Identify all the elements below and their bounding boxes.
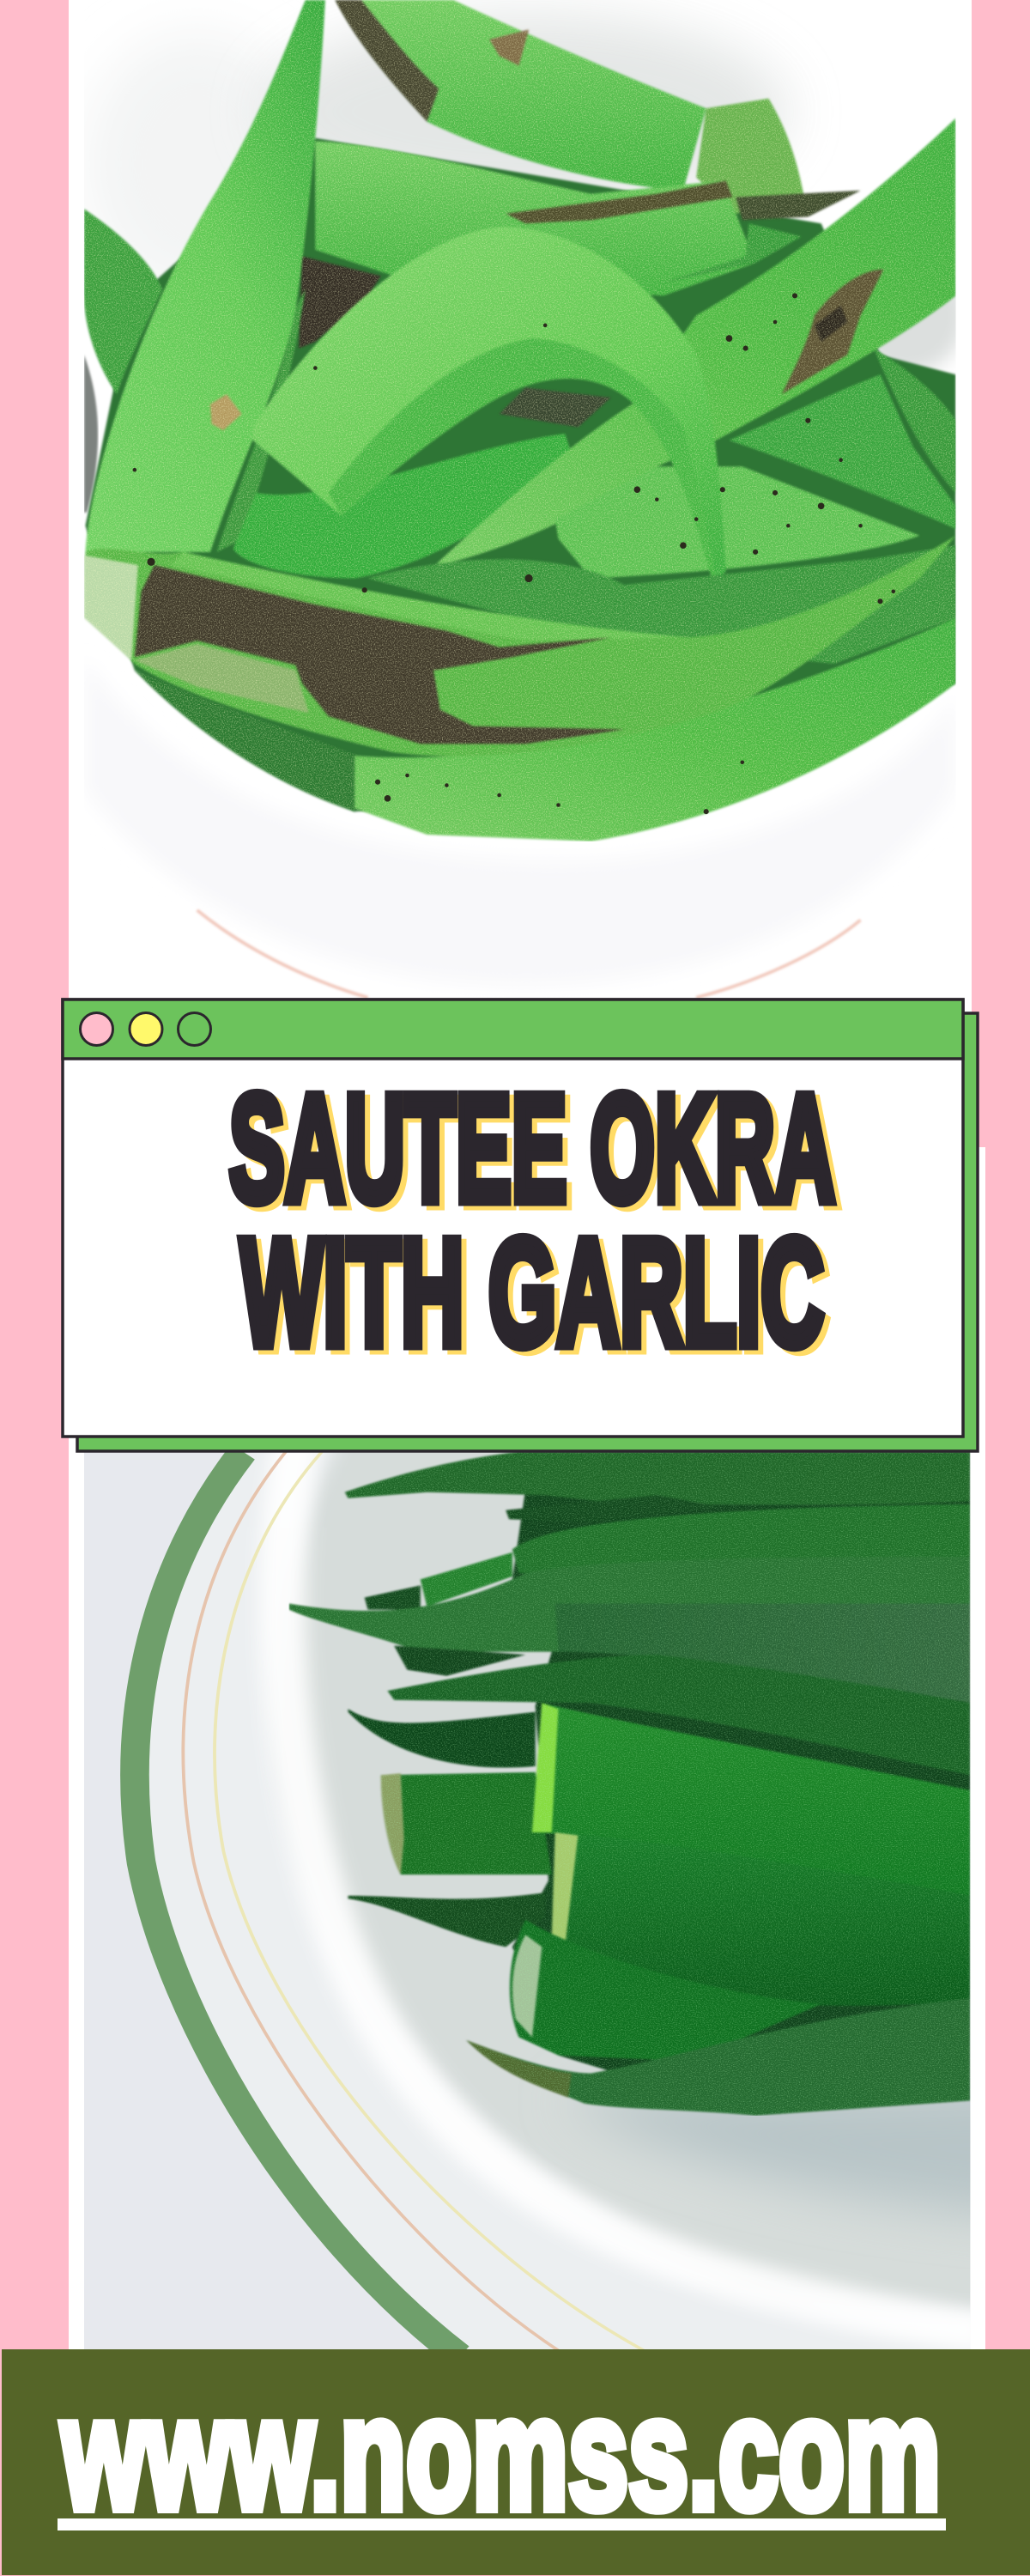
charred piece	[299, 256, 381, 349]
plate	[132, 1417, 1030, 2356]
okra: lower right pod	[729, 374, 956, 529]
okra: small dark under pod	[394, 1646, 525, 1676]
dark shadow base between pods	[512, 1452, 970, 2116]
black pepper specks	[133, 293, 895, 814]
okra: diagonal right pod	[433, 118, 956, 567]
okra: bottom pod	[354, 617, 956, 841]
okra: small front pod	[555, 466, 919, 578]
okra: top pod char	[335, 0, 439, 122]
window dot: green	[179, 1013, 211, 1046]
okra: lower cut pod	[510, 1920, 821, 2062]
okra: front bottom pod	[466, 1998, 970, 2116]
footer banner	[2, 2349, 1030, 2575]
okra: big pod cut end	[532, 1703, 559, 1832]
dark gap under arch	[500, 388, 611, 427]
okra pods pile	[84, 0, 956, 841]
okra: top pod cap	[696, 99, 804, 214]
okra: mid green pod	[233, 434, 572, 578]
white frame: bottom photo	[69, 1147, 985, 2349]
okra bunch	[289, 1452, 970, 2116]
okra: top pod cap shadow	[736, 191, 861, 220]
photo: okra on green-rimmed plate	[84, 1417, 1030, 2356]
title window	[63, 999, 963, 1437]
okra: dark lower tip	[348, 1893, 545, 1947]
okra: short pod	[421, 1552, 512, 1607]
okra: pod with long tip	[388, 1655, 970, 1775]
window body	[63, 999, 963, 1437]
okra: front pod char streak	[135, 565, 624, 744]
okra: large pod brown spot	[210, 394, 242, 430]
okra: diagonal pod char	[782, 270, 883, 394]
title: yellow drop shadow	[234, 1067, 840, 1382]
okra: front pod pale base	[135, 644, 309, 713]
okra: top pod	[345, 1452, 970, 1505]
title window: green offset shadow	[77, 1013, 978, 1451]
bowl interior and rim	[84, 0, 966, 1002]
okra: second pod	[512, 1504, 970, 1573]
window title bar	[63, 999, 963, 1059]
window dot: yellow	[130, 1013, 162, 1046]
title: main text	[229, 1063, 835, 1377]
okra: arch inner band	[329, 338, 716, 581]
okra: lower pod cut end	[512, 1935, 542, 2038]
okra: bottom pod olive tip	[466, 2040, 572, 2098]
okra: dark tip	[506, 1495, 723, 1522]
window dot: pink	[81, 1013, 113, 1046]
okra: diagonal pod dark core	[815, 306, 847, 342]
photo: okra in white bowl	[84, 0, 966, 1002]
okra: curved arch pod	[253, 227, 726, 581]
okra: back left	[84, 209, 162, 394]
okra: large pod shadow edge	[217, 289, 306, 552]
okra: big cut pod middle	[552, 1832, 970, 2006]
okra: underside dark green	[135, 671, 358, 811]
okra: second pod lower band	[663, 223, 802, 283]
okra: front pod top light strip	[171, 552, 690, 641]
okra: middle pod cut end	[552, 1832, 578, 1947]
okra: front charred pod	[85, 536, 956, 756]
white frame: top photo	[69, 0, 972, 1147]
plate rim: yellow line	[215, 1452, 644, 2350]
okra: short pod dark	[365, 1585, 421, 1609]
okra: big cut pod top	[532, 1703, 970, 1896]
okra: top pod brown spot	[489, 29, 529, 66]
plate rim: green band	[135, 1452, 460, 2356]
okra: front pod cut end	[84, 556, 138, 660]
okra: long middle pod	[289, 1557, 970, 1652]
plate rim: pink line	[183, 1452, 559, 2350]
okra: second pod char streak	[506, 180, 732, 223]
okra: short pod cut end	[381, 1773, 404, 1874]
table surface	[84, 1452, 970, 2350]
okra: behind-front dark band	[368, 545, 956, 664]
url underline	[58, 2518, 946, 2530]
okra: second back pod	[315, 142, 755, 295]
okra: top pod	[335, 0, 706, 191]
okra: short left cut pod	[381, 1772, 552, 1874]
okra: grey-green pod	[555, 1603, 970, 1703]
okra: large left pod	[85, 0, 325, 552]
okra: dark curved tip	[348, 1709, 536, 1768]
okra: back right	[874, 349, 956, 493]
